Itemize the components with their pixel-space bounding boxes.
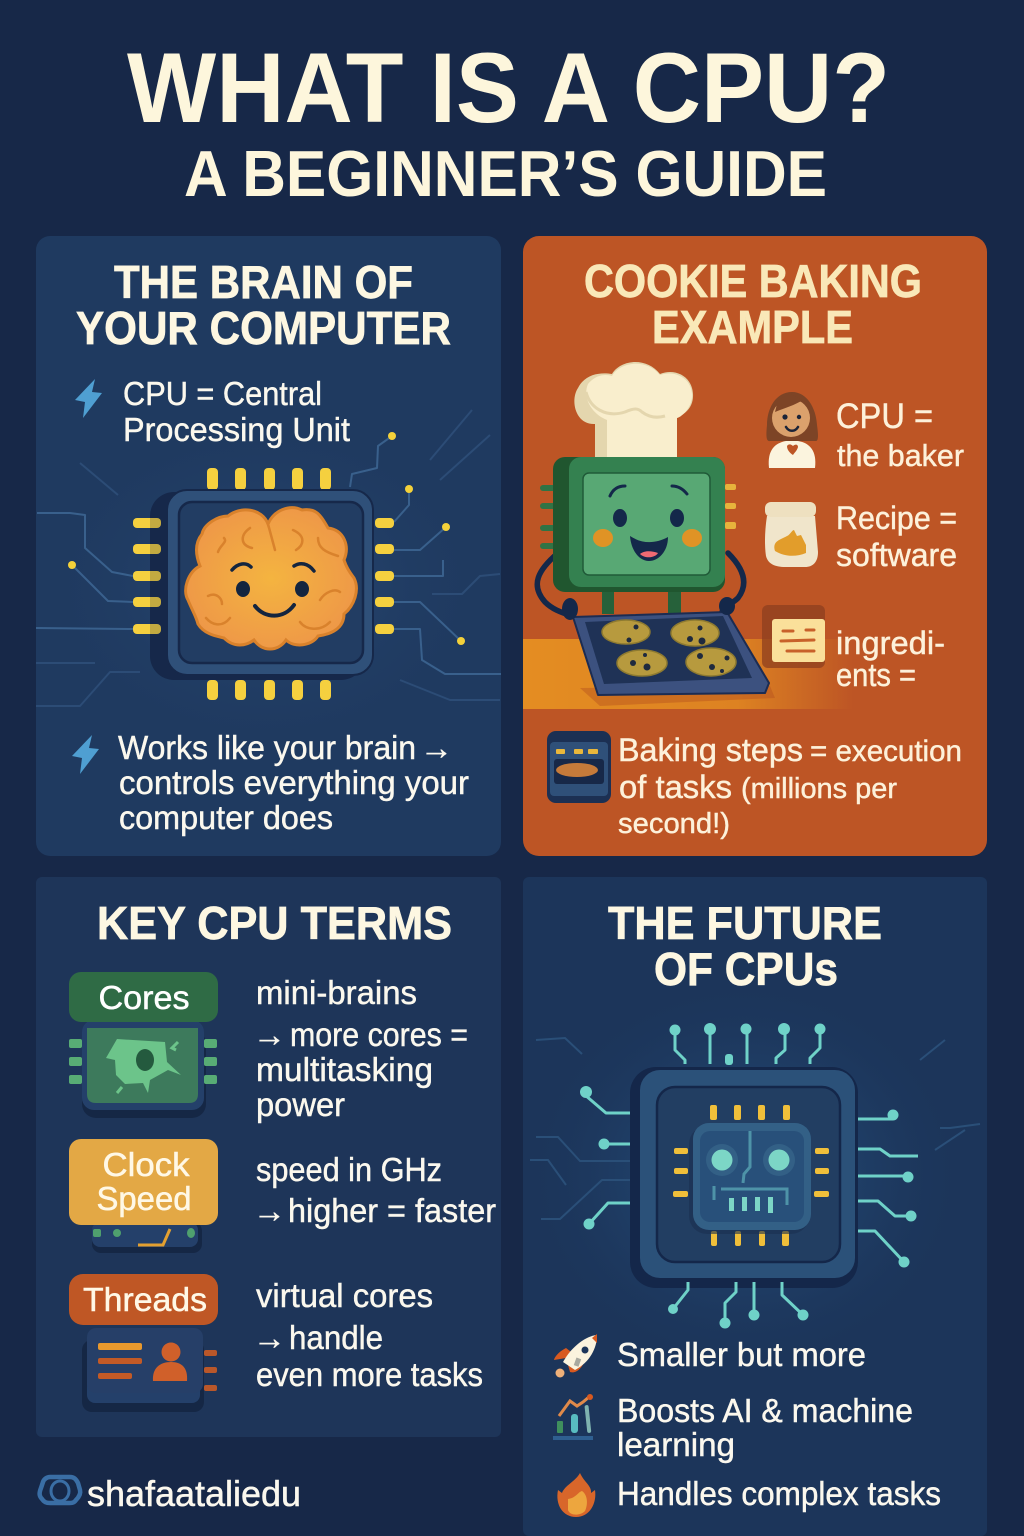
text: CPU definition: Processing Unit xyxy=(123,411,350,448)
heading: the future of CPUs: OF CPUs xyxy=(654,943,838,995)
text: ingredients: ingredi- xyxy=(836,625,945,661)
text: cores description: more cores = xyxy=(290,1016,468,1053)
text: baking steps: = execution xyxy=(810,735,962,768)
legs xyxy=(602,590,681,614)
icon: threads card xyxy=(82,1328,217,1412)
heading: cookie baking example: EXAMPLE xyxy=(652,301,853,353)
heading: cookie baking example xyxy=(584,255,922,353)
icon: rocket xyxy=(554,1334,597,1378)
icon: oven xyxy=(547,731,611,803)
panel: cookie baking example xyxy=(523,236,987,856)
icon: baker xyxy=(766,392,818,468)
badge: cores: Cores xyxy=(98,979,190,1016)
badge: cores xyxy=(69,972,218,1022)
icon: lightning bolt xyxy=(75,379,102,418)
text: clock speed description: higher = faster xyxy=(288,1192,496,1229)
text: threads description: virtual cores xyxy=(256,1277,433,1314)
text: boosts AI xyxy=(617,1392,913,1463)
term: clock speed xyxy=(69,1139,496,1253)
handle: shafaataliedu: shafaataliedu xyxy=(87,1473,301,1514)
icon: recipe jar xyxy=(765,502,818,567)
arms xyxy=(537,553,744,616)
heading: the brain of your computer: THE BRAIN OF xyxy=(114,256,413,308)
text: clock speed description xyxy=(253,1151,496,1229)
text: clock speed description: speed in GHz xyxy=(256,1151,442,1188)
icon: chip chef character xyxy=(537,362,744,616)
text: works like your brain: Works like your brain xyxy=(118,729,416,766)
text: works like your brain: → xyxy=(420,729,453,766)
text: ingredients xyxy=(836,625,945,693)
screen face xyxy=(583,473,710,575)
badge: threads xyxy=(69,1274,218,1325)
text: recipe = software: software xyxy=(836,537,957,573)
text: works like your brain xyxy=(118,729,469,836)
text: threads description xyxy=(253,1277,483,1393)
kitchen counter xyxy=(523,639,853,709)
panel: key CPU terms xyxy=(36,877,501,1437)
text: CPU = the baker: CPU = xyxy=(836,397,933,436)
text: cores description: power xyxy=(256,1086,345,1123)
heading: the future of CPUs: THE FUTURE xyxy=(608,897,882,949)
chef hat xyxy=(574,362,693,458)
heading: the brain of your computer: YOUR COMPUTER xyxy=(76,302,451,354)
chip with brain xyxy=(133,468,394,700)
title: WHAT IS A CPU? xyxy=(127,32,890,143)
text: baking steps xyxy=(618,732,962,840)
text: cores description xyxy=(253,974,468,1123)
icon: clock chip xyxy=(92,1222,202,1253)
text: clock speed description: → xyxy=(253,1192,286,1229)
panel: the future of CPUs xyxy=(520,877,987,1536)
icon: ingredients note xyxy=(762,605,825,668)
icon: flame xyxy=(557,1473,595,1517)
text: threads description: handle xyxy=(289,1319,383,1356)
circuit traces xyxy=(530,1023,980,1268)
text: CPU definition xyxy=(123,375,350,448)
text: recipe = software xyxy=(836,500,957,573)
badge: clock speed: Clock xyxy=(102,1146,190,1183)
text: CPU = the baker: the baker xyxy=(837,438,964,473)
icon: cores chip xyxy=(69,1020,217,1118)
panel: the brain of your computer xyxy=(35,236,501,856)
text: boosts AI: Boosts AI & machine xyxy=(617,1392,913,1429)
icon: growth chart xyxy=(553,1394,593,1440)
icon: social camera xyxy=(40,1477,80,1503)
text: threads description: → xyxy=(253,1319,286,1356)
icon: lightning bolt xyxy=(72,735,99,774)
text: CPU definition: CPU = Central xyxy=(123,375,322,412)
heading: the future of CPUs xyxy=(608,897,882,995)
text: CPU = the baker xyxy=(836,397,964,473)
circuit traces xyxy=(36,410,501,706)
illustration: robot chip xyxy=(530,1023,980,1328)
text: smaller but more: Smaller but more xyxy=(617,1336,866,1373)
text: baking steps: second!) xyxy=(618,808,730,840)
pins xyxy=(540,485,556,549)
term: cores xyxy=(69,972,468,1123)
text: works like your brain: controls everything your xyxy=(119,764,469,801)
heading: key CPU terms: KEY CPU TERMS xyxy=(97,897,452,949)
text: baking steps: Baking steps xyxy=(618,732,803,768)
text: ingredients: ents = xyxy=(836,657,916,693)
heading: the brain of your computer xyxy=(76,256,451,354)
badge: clock speed: Speed xyxy=(96,1180,192,1217)
term: threads xyxy=(69,1274,483,1412)
badge: threads: Threads xyxy=(83,1281,207,1318)
subtitle: A BEGINNER’S GUIDE xyxy=(184,137,827,210)
text: boosts AI: learning xyxy=(617,1426,735,1463)
bottom traces xyxy=(668,1282,808,1328)
text: baking steps: (millions per xyxy=(741,773,897,805)
text: cores description: mini-brains xyxy=(256,974,417,1011)
yellow pins xyxy=(673,1105,829,1246)
badge: clock speed xyxy=(69,1139,218,1225)
chip body xyxy=(553,457,725,592)
icon: smiling brain xyxy=(186,508,356,649)
robot face xyxy=(689,1123,811,1234)
heading: cookie baking example: COOKIE BAKING xyxy=(584,255,922,307)
text: cores description: → xyxy=(253,1016,286,1053)
text: works like your brain: computer does xyxy=(119,799,333,836)
text: handles complex tasks: Handles complex tasks xyxy=(617,1475,941,1512)
baking tray with cookies xyxy=(562,597,775,706)
text: threads description: even more tasks xyxy=(256,1356,483,1393)
text: recipe = software: Recipe = xyxy=(836,500,957,536)
text: cores description: multitasking xyxy=(256,1051,433,1088)
text: baking steps: of tasks xyxy=(619,769,732,805)
